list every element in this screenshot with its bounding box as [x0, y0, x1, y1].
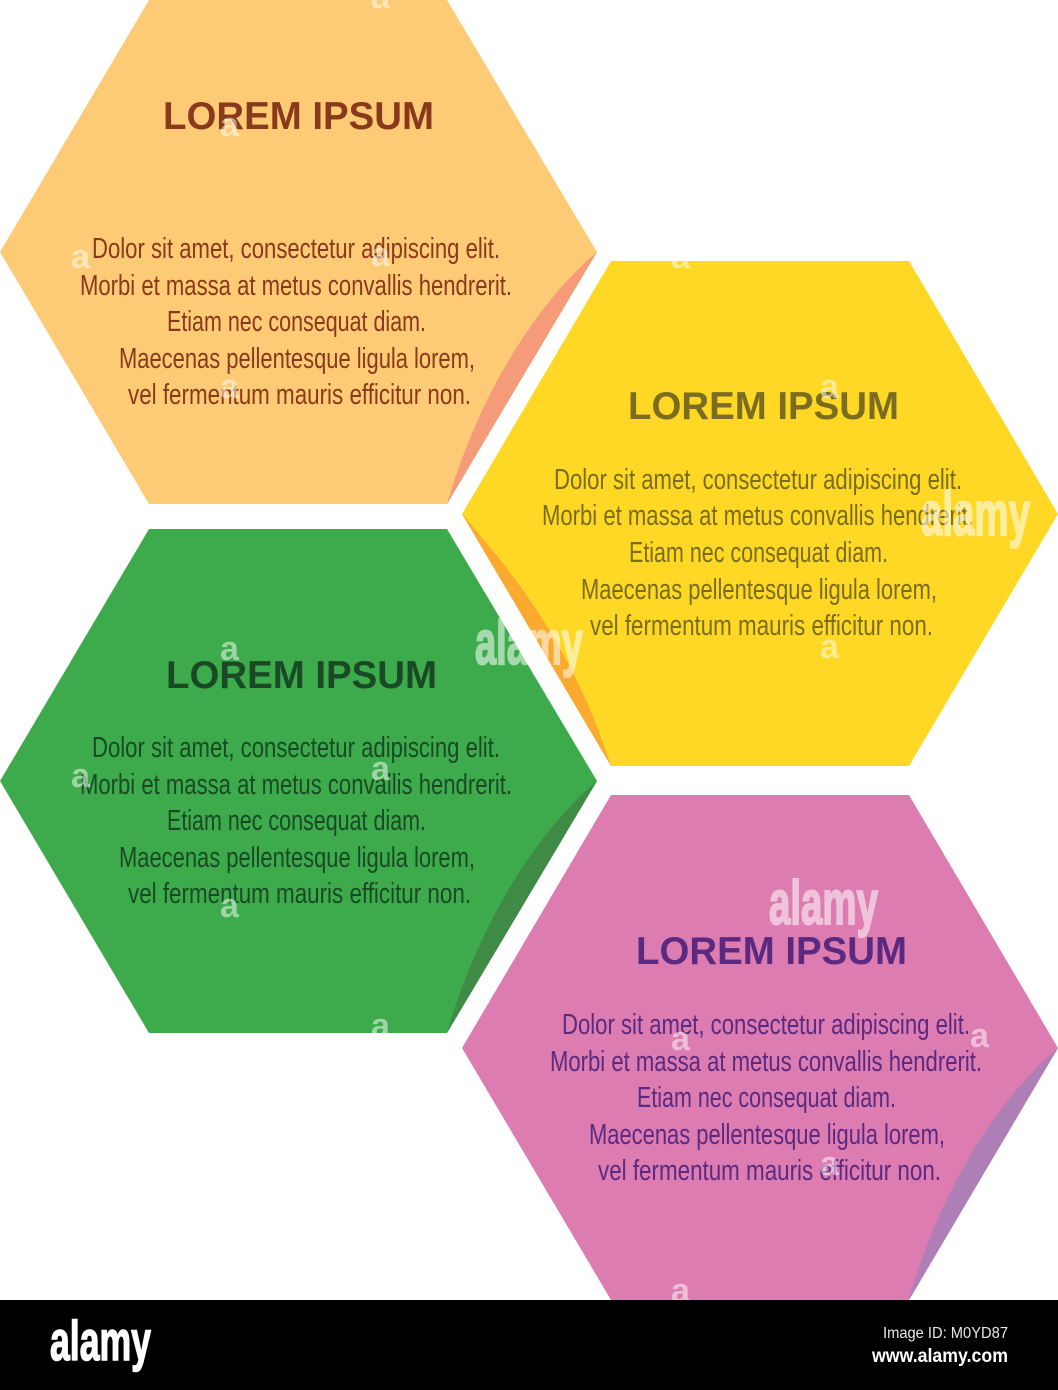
- watermarks: a: [820, 1145, 840, 1183]
- green body text: Dolor sit amet, consectetur adipiscing elit.: [92, 732, 500, 764]
- website: www.alamy.com: [871, 1346, 1008, 1367]
- footer logo: alamy: [50, 1309, 151, 1372]
- yellow body text: vel fermentum mauris efficitur non.: [590, 610, 933, 642]
- green body text: vel fermentum mauris efficitur non.: [128, 878, 471, 910]
- watermarks: a: [220, 368, 240, 406]
- green page curl: [447, 781, 597, 1033]
- watermarks: a: [671, 1272, 691, 1310]
- watermarks: a: [71, 238, 91, 276]
- green heading: LOREM IPSUM: [166, 654, 437, 697]
- orange body text: Morbi et massa at metus convallis hendrerit.: [80, 270, 512, 302]
- watermarks: a: [820, 628, 840, 666]
- watermarks: a: [970, 1017, 990, 1055]
- pink hexagon shape: [462, 795, 1058, 1300]
- panel: pink hexagon: [462, 795, 1058, 1300]
- image id: Image ID: M0YD87: [883, 1325, 1008, 1342]
- watermarks: a: [71, 757, 91, 795]
- watermarks: a: [371, 236, 391, 274]
- pink body text: Maecenas pellentesque ligula lorem,: [589, 1119, 945, 1151]
- watermarks: a: [220, 887, 240, 925]
- orange body text: Etiam nec consequat diam.: [167, 306, 426, 338]
- panel: yellow hexagon: [462, 261, 1058, 766]
- green hexagon shape: [0, 529, 597, 1033]
- watermarks: a: [371, 1007, 391, 1045]
- watermarks: alamy: [769, 869, 878, 938]
- pink body text: Etiam nec consequat diam.: [637, 1082, 896, 1114]
- footer bar: [0, 1300, 1058, 1390]
- watermarks: a: [671, 238, 691, 276]
- green body text: Maecenas pellentesque ligula lorem,: [119, 842, 475, 874]
- orange page curl: [447, 252, 597, 504]
- yellow body text: Maecenas pellentesque ligula lorem,: [581, 574, 937, 606]
- pink body text: vel fermentum mauris efficitur non.: [598, 1155, 941, 1187]
- orange body text: Maecenas pellentesque ligula lorem,: [119, 343, 475, 375]
- panel: orange hexagon: [0, 0, 597, 504]
- yellow heading: LOREM IPSUM: [628, 385, 899, 428]
- yellow page curl: [462, 514, 611, 766]
- pink page curl: [909, 1048, 1058, 1300]
- orange body text: Dolor sit amet, consectetur adipiscing elit.: [92, 233, 500, 265]
- green body text: [80, 732, 512, 910]
- watermarks: a: [220, 630, 240, 668]
- watermarks: a: [371, 750, 391, 788]
- orange heading: LOREM IPSUM: [163, 95, 434, 138]
- green body text: Morbi et massa at metus convallis hendrerit.: [80, 769, 512, 801]
- yellow body text: [542, 464, 974, 642]
- orange hexagon shape: [0, 0, 597, 504]
- watermarks: a: [671, 1020, 691, 1058]
- pink body text: [550, 1009, 982, 1187]
- orange body text: [80, 233, 512, 411]
- yellow body text: Etiam nec consequat diam.: [629, 537, 888, 569]
- yellow hexagon shape: [462, 261, 1058, 766]
- watermarks: alamy: [475, 609, 583, 678]
- orange body text: vel fermentum mauris efficitur non.: [128, 379, 471, 411]
- green body text: Etiam nec consequat diam.: [167, 805, 426, 837]
- watermarks: a: [220, 106, 240, 144]
- panel: green hexagon: [0, 529, 597, 1033]
- pink heading: LOREM IPSUM: [636, 930, 907, 973]
- watermarks: a: [820, 368, 840, 406]
